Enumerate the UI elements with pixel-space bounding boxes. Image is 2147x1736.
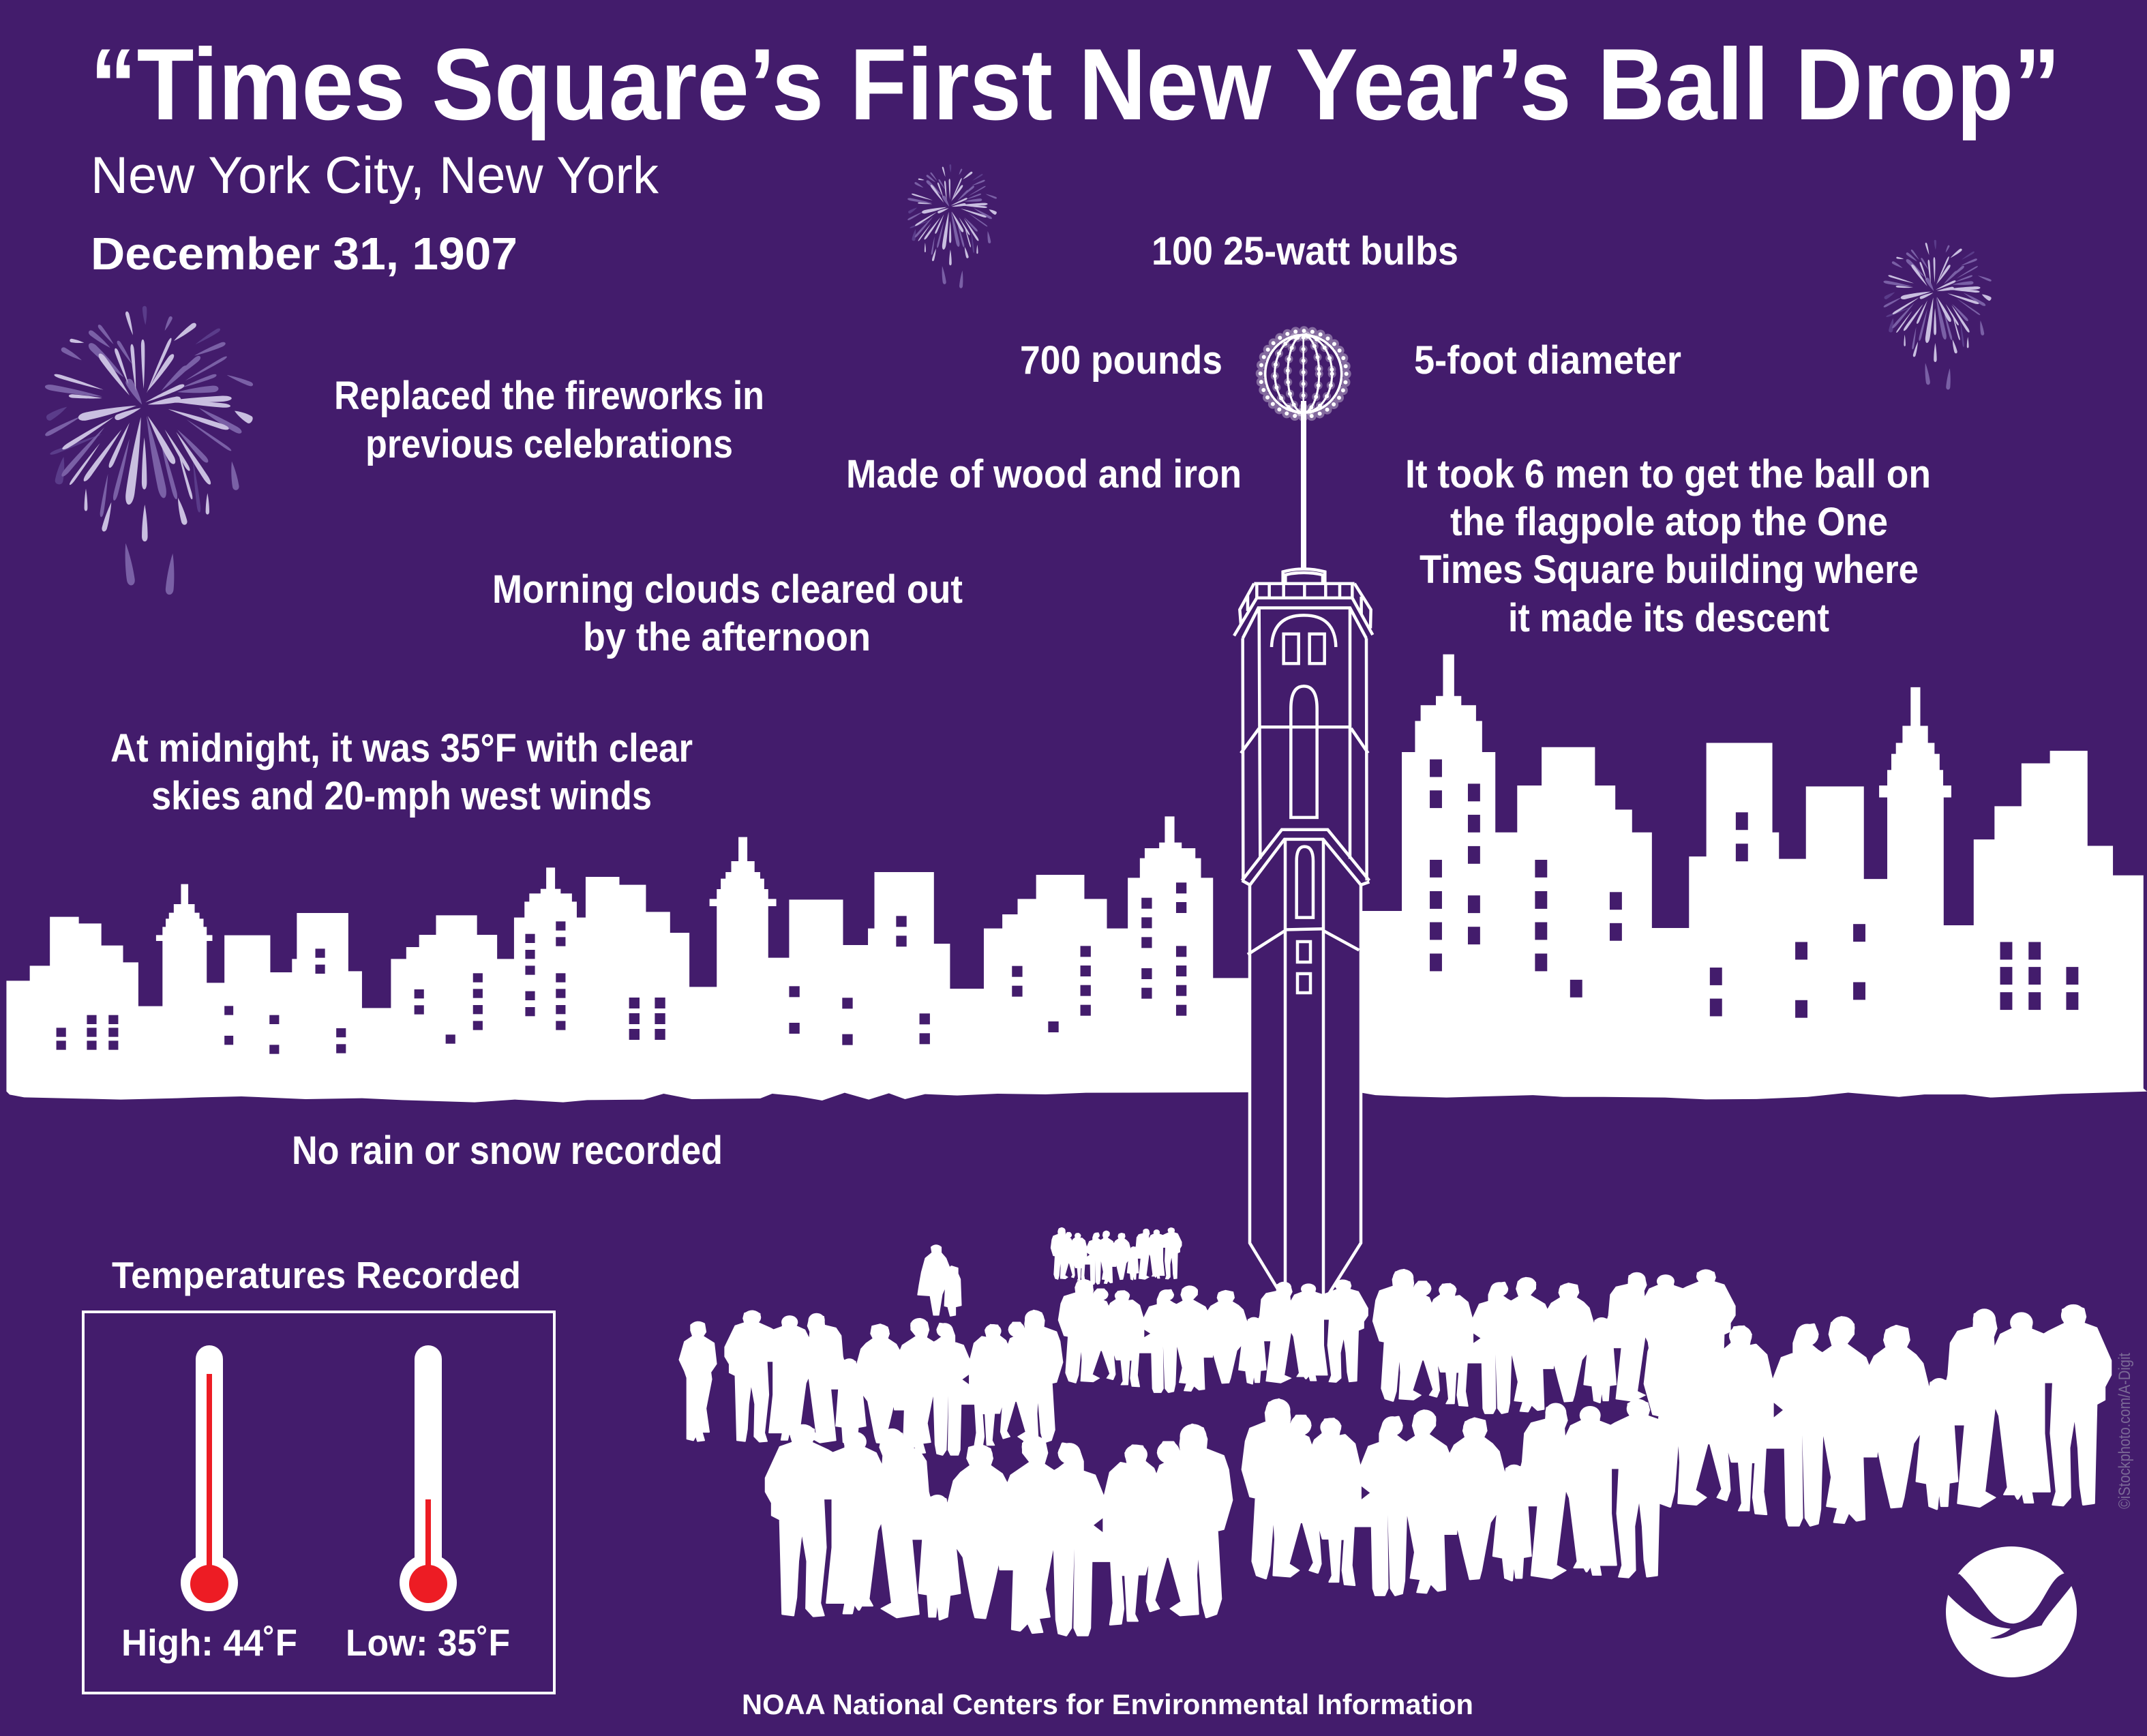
tower: One Times Square outline [1234,569,1372,1298]
label: low temperature: Low: 35˚F [346,1621,510,1664]
crowd: lower left group [766,1424,1232,1636]
fact: midnight weather [110,726,693,818]
ball with lights [1261,331,1347,417]
crowd: middle group A [1059,1279,1368,1392]
icon: small firework right [1883,240,1992,390]
fact: six men: the flagpole atop the One [1450,500,1888,544]
fact: midnight weather: At midnight, it was 35°F with clear [110,726,693,770]
subtitle: location: New York City, New York [91,147,659,205]
tower upper section [1234,569,1372,955]
crowd: middle group B [1373,1269,1735,1413]
fact: replaced fireworks: previous celebrations [365,422,733,466]
fact: no rain or snow: No rain or snow recorded [292,1128,723,1173]
flagpole [1301,401,1306,569]
lone person [680,1322,716,1441]
fact: 100 bulbs: 100 25-watt bulbs [1152,229,1458,273]
icon: small firework top [907,164,997,288]
fact: made of wood and iron: Made of wood and iron [846,452,1242,496]
fact: six men: Times Square building where [1420,548,1919,592]
tower lower shaft [1250,839,1361,1298]
crowd: upper left group [725,1310,1062,1455]
crowd: lower middle group [1242,1398,1672,1596]
fact: morning clouds: Morning clouds cleared out [492,567,963,612]
right skyline windows [1430,760,2078,1018]
thermometer: low [400,1345,457,1611]
fact: midnight weather: skies and 20-mph west winds [151,774,652,818]
fact: six men: It took 6 men to get the ball on [1405,452,1931,496]
left skyline [6,816,1249,1103]
crowd of people silhouettes [680,1227,2111,1636]
fact: six men: it made its descent [1508,596,1829,640]
icon: large firework [44,306,254,595]
fact: morning clouds: by the afternoon [583,615,871,659]
credit: photo: ©iStockphoto.com/A-Digit [2116,1353,2134,1509]
heading: temperatures recorded: Temperatures Recorded [112,1254,521,1296]
logo: NOAA [1932,1546,2084,1677]
fact: replaced fireworks [334,374,764,466]
thermometer: high [181,1345,238,1611]
label: high temperature: High: 44˚F [121,1621,297,1664]
date: December 31, 1907 [91,228,517,280]
right skyline [1361,655,2147,1099]
panel: temperatures box [83,1312,554,1693]
fact: 700 pounds: 700 pounds [1020,338,1222,383]
crowd: right group [1645,1304,2111,1526]
left skyline windows [57,882,1186,1054]
fact: 5-foot diameter: 5-foot diameter [1414,338,1681,383]
fact: six men [1405,452,1931,640]
fact: replaced fireworks: Replaced the fireworks in [334,374,764,418]
footer: source: NOAA National Centers for Environmental Information [742,1688,1473,1720]
fact: morning clouds [492,567,963,659]
crowd: far small group [1051,1227,1182,1285]
adult and child pair [918,1245,961,1316]
